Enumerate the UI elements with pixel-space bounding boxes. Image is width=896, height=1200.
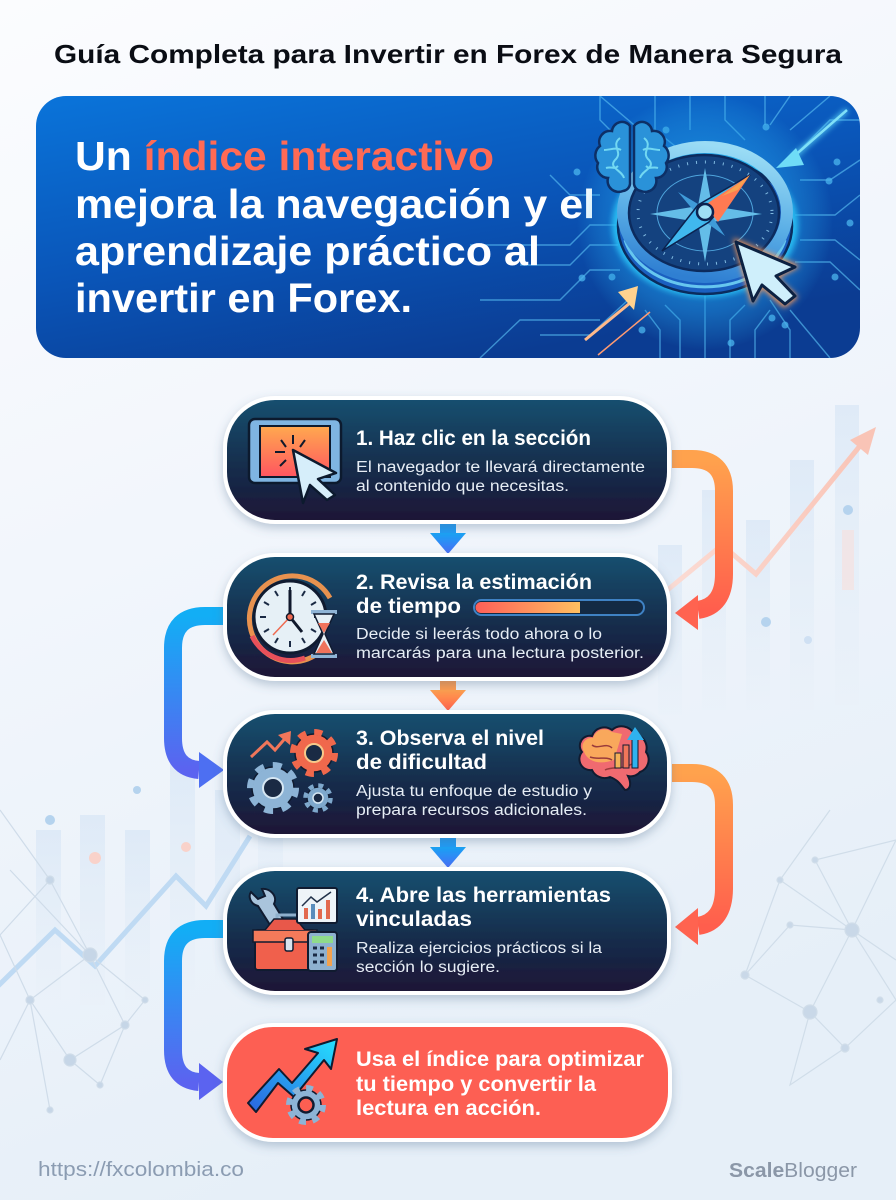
background network: lower left: [0, 810, 148, 1113]
text: hero message: aprendizaje práctico al: [75, 228, 540, 274]
panel: step 1: [225, 398, 669, 522]
arrow: down 3 to 4: [430, 834, 466, 868]
text: step 1: [356, 427, 645, 495]
arrow: step 4 to closing (blue): [173, 929, 224, 1100]
arrow: step 2 to step 3 (blue): [173, 616, 224, 788]
text: hero message: mejora la navegación y el: [75, 181, 595, 227]
icon: clock and hourglass: [249, 576, 337, 662]
icon: toolbox, wrench, chart and calculator: [250, 888, 337, 971]
text: step 3: Ajusta tu enfoque de estudio y: [356, 783, 592, 800]
arrow: step 3 to step 4 (orange): [672, 773, 724, 945]
background network: lower right: [741, 810, 896, 1085]
text: step 2: marcarás para una lectura posterior.: [356, 645, 644, 662]
panel: closing call to action: [225, 1025, 670, 1140]
icon: tablet with cursor: [249, 419, 341, 503]
text: step 4: sección lo sugiere.: [356, 959, 500, 976]
panel: step 4: [225, 869, 669, 993]
footer: brand: ScaleBlogger: [729, 1160, 857, 1182]
text: closing message: tu tiempo y convertir la: [356, 1073, 596, 1096]
text: step 4: 4. Abre las herramientas: [356, 884, 611, 907]
panel: step 2: [225, 555, 669, 679]
text: hero message: invertir en Forex.: [75, 275, 412, 321]
text: step 1: al contenido que necesitas.: [356, 478, 569, 495]
text: step 2: [356, 571, 644, 662]
text: step 2: Decide si leerás todo ahora o lo: [356, 626, 602, 643]
text: step 4: vinculadas: [356, 908, 472, 931]
text: step 3: 3. Observa el nivel: [356, 727, 544, 750]
text: closing message: lectura en acción.: [356, 1097, 541, 1120]
circuit lines: [470, 96, 860, 358]
text: step 3: prepara recursos adicionales.: [356, 802, 587, 819]
progress bar: [474, 600, 644, 615]
text: step 2: 2. Revisa la estimación: [356, 571, 592, 594]
arrow: cyan incoming: [776, 110, 847, 168]
text: step 3: [356, 727, 592, 819]
arrow: peach incoming: [585, 286, 650, 355]
text: step 1: 1. Haz clic en la sección: [356, 427, 591, 450]
hero banner: [36, 94, 860, 358]
text: hero message: [75, 133, 595, 321]
icon: compass with brain and cursor: [577, 94, 847, 355]
arrow: down 1 to 2: [430, 520, 466, 554]
text: step 4: Realiza ejercicios prácticos si la: [356, 940, 602, 957]
text: hero message: Un índice interactivo: [75, 133, 494, 179]
text: step 3: de dificultad: [356, 751, 487, 774]
footer: source url: https://fxcolombia.co: [38, 1159, 244, 1181]
background chart: right: [658, 405, 876, 715]
text: step 4: [356, 884, 611, 976]
text: step 1: El navegador te llevará directamente: [356, 459, 645, 476]
icon: brain: [595, 122, 669, 192]
icon: brain with chart: [579, 726, 649, 790]
background chart: left: [0, 760, 283, 1005]
text: closing message: Usa el índice para optimizar: [356, 1048, 644, 1071]
arrow: step 1 to step 3 side (orange): [672, 459, 724, 630]
icon: rising arrow with gear: [248, 1039, 337, 1122]
text: closing message: [356, 1048, 644, 1120]
arrow: down 2 to 3: [430, 678, 466, 711]
icon: gears and trend: [250, 731, 335, 811]
text: step 2: de tiempo: [356, 595, 461, 618]
panel: step 3: [225, 712, 669, 836]
title: Guía Completa para Invertir en Forex de Manera Segura: [54, 39, 843, 69]
